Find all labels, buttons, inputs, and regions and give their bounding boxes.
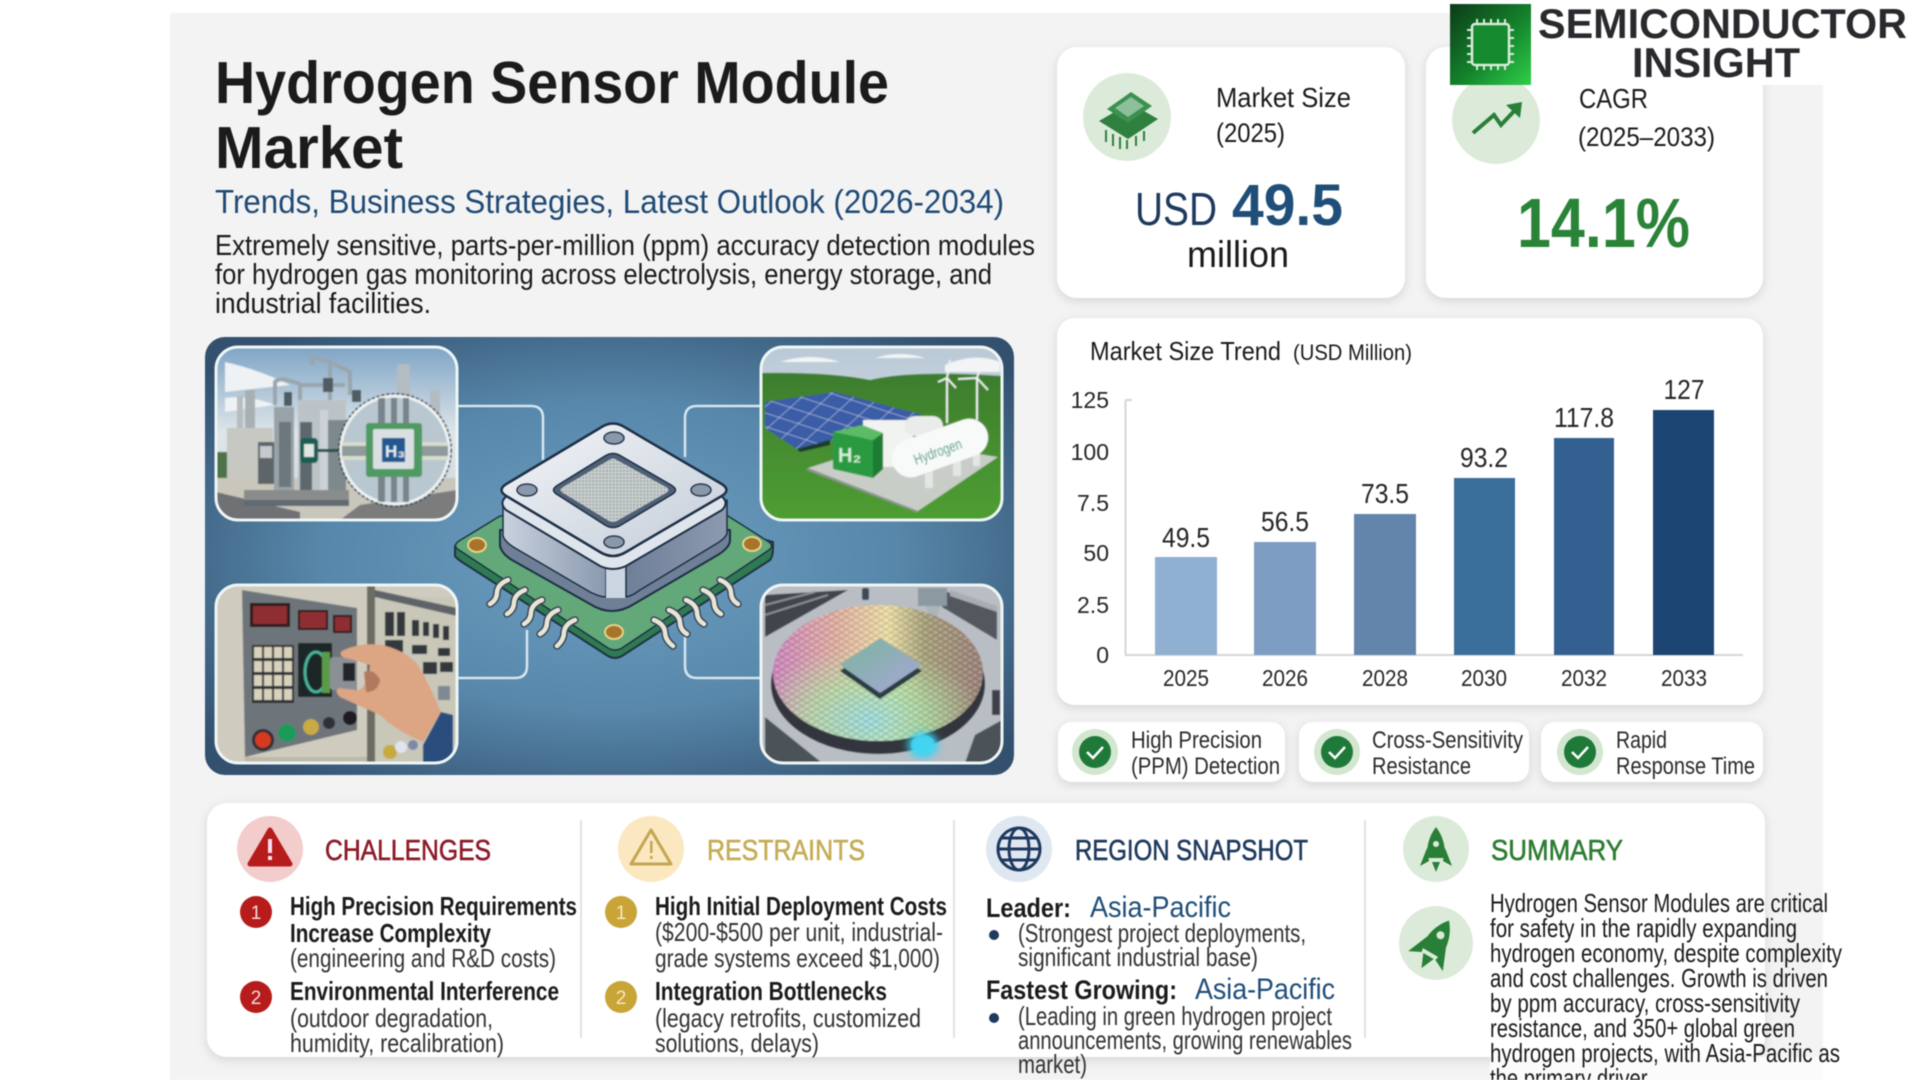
chart title: Market Size Trend (1090, 336, 1281, 366)
market size label: (2025) (1216, 118, 1285, 148)
side panel controls (385, 612, 453, 674)
y axis: 100 (1071, 439, 1109, 465)
summary text: resistance, and 350+ global green (1490, 1013, 1795, 1043)
thumbnail: control panel with hand (216, 585, 457, 763)
market size value: 49.5 (1232, 173, 1343, 238)
leader region: Leader: (986, 893, 1071, 923)
description text: for hydrogen gas monitoring across electrolysis, energy storage, and (215, 259, 992, 291)
sensor module (330, 657, 357, 690)
magnifier inset (339, 394, 451, 506)
market size value (1135, 173, 1343, 275)
connector lines (457, 406, 761, 678)
central hydrogen sensor module (455, 424, 773, 658)
bar values: 127 (1664, 374, 1704, 405)
icon: caution (618, 816, 684, 882)
x axis labels: 2026 (1262, 665, 1308, 691)
restraint 2: Integration Bottlenecks (655, 976, 887, 1006)
restraints heading: RESTRAINTS (707, 835, 865, 867)
feature pill: high precision: High Precision (1131, 727, 1262, 754)
challenge 2: Environmental Interference (290, 976, 559, 1006)
CAGR value: 14.1% (1517, 184, 1690, 262)
subtitle: Trends, Business Strategies, Latest Outlook (2026-2034) (215, 183, 1004, 220)
icon: chip (1083, 73, 1171, 161)
feature pill: high precision: (PPM) Detection (1131, 753, 1280, 780)
summary text backing (1490, 1057, 1823, 1080)
chart title (1090, 336, 1412, 366)
fastest growing region: market) (1018, 1049, 1087, 1079)
logo: Semiconductor Insight: SEMICONDUCTOR (1538, 0, 1907, 47)
challenge 1 (240, 891, 577, 973)
panel: bottom insights (207, 803, 1765, 1057)
y axis: 2.5 (1077, 592, 1109, 618)
restraint 1: grade systems exceed $1,000) (655, 943, 940, 973)
leader region (986, 891, 1306, 972)
icon: upright rocket (1403, 816, 1469, 882)
feature pill: rapid response: Rapid (1616, 727, 1667, 754)
panel: hydrogen sensor illustration (205, 337, 1014, 775)
y axis: 7.5 (1077, 490, 1109, 516)
mesh window (554, 454, 676, 528)
summary text: and cost challenges. Growth is driven (1490, 963, 1828, 993)
CAGR label: CAGR (1579, 83, 1648, 114)
buttons (252, 729, 274, 751)
x axis labels: 2033 (1661, 665, 1707, 691)
lid top (502, 424, 726, 556)
feature pill: rapid response (1541, 722, 1763, 782)
panel: market size trend chart (1057, 318, 1763, 705)
keypad (252, 645, 294, 703)
bar values: 117.8 (1554, 402, 1614, 433)
restraint 2: 2 (616, 988, 626, 1009)
title: Market (215, 115, 403, 181)
section: region snapshot (986, 816, 1352, 1079)
storage tanks: Hydrogen (912, 436, 964, 469)
magnifier inset: H₃ (385, 442, 405, 461)
icon: diagonal rocket (1399, 906, 1473, 980)
challenge 2: 2 (251, 988, 261, 1009)
challenge 1: High Precision Requirements (290, 891, 577, 921)
housing sides (503, 500, 606, 597)
section: summary (1399, 816, 1842, 1080)
lid rim (502, 436, 726, 569)
fastest growing region: announcements, growing renewables (1018, 1025, 1352, 1055)
CAGR label: (2025–2033) (1578, 122, 1715, 152)
title: Hydrogen Sensor Module (215, 50, 889, 116)
challenge 1: Increase Complexity (290, 918, 491, 948)
leader region: (Strongest project deployments, (1018, 918, 1306, 948)
challenge 2: humidity, recalibration) (290, 1028, 504, 1058)
x axis labels: 2032 (1561, 665, 1607, 691)
logo: Semiconductor Insight (1450, 0, 1920, 86)
feature pill: cross-sensitivity (1299, 722, 1529, 782)
thumbnail: green hydrogen storage (761, 347, 1002, 520)
x axis labels (1163, 665, 1707, 691)
displays (250, 603, 290, 627)
section: restraints (605, 816, 947, 1058)
summary text: for safety in the rapidly expanding (1490, 913, 1797, 943)
y axis: 50 (1083, 540, 1109, 566)
restraint 1: High Initial Deployment Costs (655, 891, 947, 921)
market size label: Market Size (1216, 82, 1351, 113)
solar panels (765, 392, 923, 452)
x axis labels: 2030 (1461, 665, 1507, 691)
x axis labels: 2025 (1163, 665, 1209, 691)
feature pill: cross-sensitivity: Cross-Sensitivity (1372, 727, 1523, 754)
title (215, 50, 889, 181)
restraint 1 (605, 891, 947, 973)
thumbnail: green hydrogen storage: H₂ (838, 445, 861, 467)
bar values (1162, 374, 1704, 553)
CAGR label (1578, 83, 1715, 152)
bar values: 49.5 (1162, 522, 1210, 553)
summary text: Hydrogen Sensor Modules are critical (1490, 888, 1828, 918)
panel: CAGR card (1426, 47, 1763, 298)
feature pill: cross-sensitivity: Resistance (1372, 753, 1471, 780)
section: challenges (237, 816, 577, 1058)
restraint 1: 1 (616, 903, 626, 924)
region heading: REGION SNAPSHOT (1075, 835, 1308, 867)
icon: warning (237, 816, 303, 882)
hand (336, 644, 441, 742)
restraint 2 (605, 976, 921, 1058)
metal housing flange (500, 530, 730, 611)
restraint 2: (legacy retrofits, customized (655, 1003, 921, 1033)
y axis (1071, 387, 1743, 668)
thumbnail: electrolysis plant (216, 347, 457, 520)
thumbnail: silicon wafer (761, 585, 1002, 763)
market size value: USD (1135, 183, 1217, 235)
market size label (1216, 82, 1351, 148)
icon: globe (986, 816, 1052, 882)
bars (1155, 410, 1714, 655)
fastest growing region: (Leading in green hydrogen project (1018, 1001, 1333, 1031)
summary text: by ppm accuracy, cross-sensitivity (1490, 988, 1800, 1018)
market size value: million (1187, 234, 1289, 275)
x axis labels: 2028 (1362, 665, 1408, 691)
challenge 1: 1 (251, 903, 261, 924)
summary heading: SUMMARY (1491, 835, 1623, 867)
challenge 1: (engineering and R&D costs) (290, 943, 556, 973)
storage tanks (863, 413, 993, 488)
icon: trend arrow (1452, 76, 1540, 164)
fastest growing region (986, 973, 1352, 1079)
pcb board (455, 500, 773, 658)
leader region: significant industrial base) (1018, 942, 1258, 972)
y axis: 125 (1071, 387, 1109, 413)
summary text (1490, 888, 1842, 1080)
description text: Extremely sensitive, parts-per-million (ppm) accuracy detection modules (215, 230, 1035, 262)
feature pill: rapid response: Response Time (1616, 753, 1755, 780)
bar values: 93.2 (1460, 442, 1508, 473)
restraint 1: ($200-$500 per unit, industrial- (655, 917, 943, 947)
fastest growing region: Fastest Growing: (986, 975, 1177, 1005)
challenges heading: CHALLENGES (325, 835, 491, 867)
chart title: (USD Million) (1293, 340, 1412, 365)
thumbnail frames (216, 347, 1002, 763)
logo: Semiconductor Insight: INSIGHT (1632, 39, 1800, 86)
leader region: Asia-Pacific (1090, 891, 1231, 924)
panel: market size card (1057, 47, 1405, 298)
y axis: 0 (1096, 642, 1109, 668)
restraint 2: solutions, delays) (655, 1028, 819, 1058)
bar values: 56.5 (1261, 506, 1309, 537)
sensor pins (490, 580, 738, 646)
description text (215, 230, 1035, 320)
bar values: 73.5 (1361, 478, 1409, 509)
challenge 2: (outdoor degradation, (290, 1003, 493, 1033)
description text: industrial facilities. (215, 288, 431, 320)
feature pill: high precision (1058, 722, 1285, 782)
challenge 2 (240, 976, 559, 1058)
fastest growing region: Asia-Pacific (1195, 973, 1335, 1006)
